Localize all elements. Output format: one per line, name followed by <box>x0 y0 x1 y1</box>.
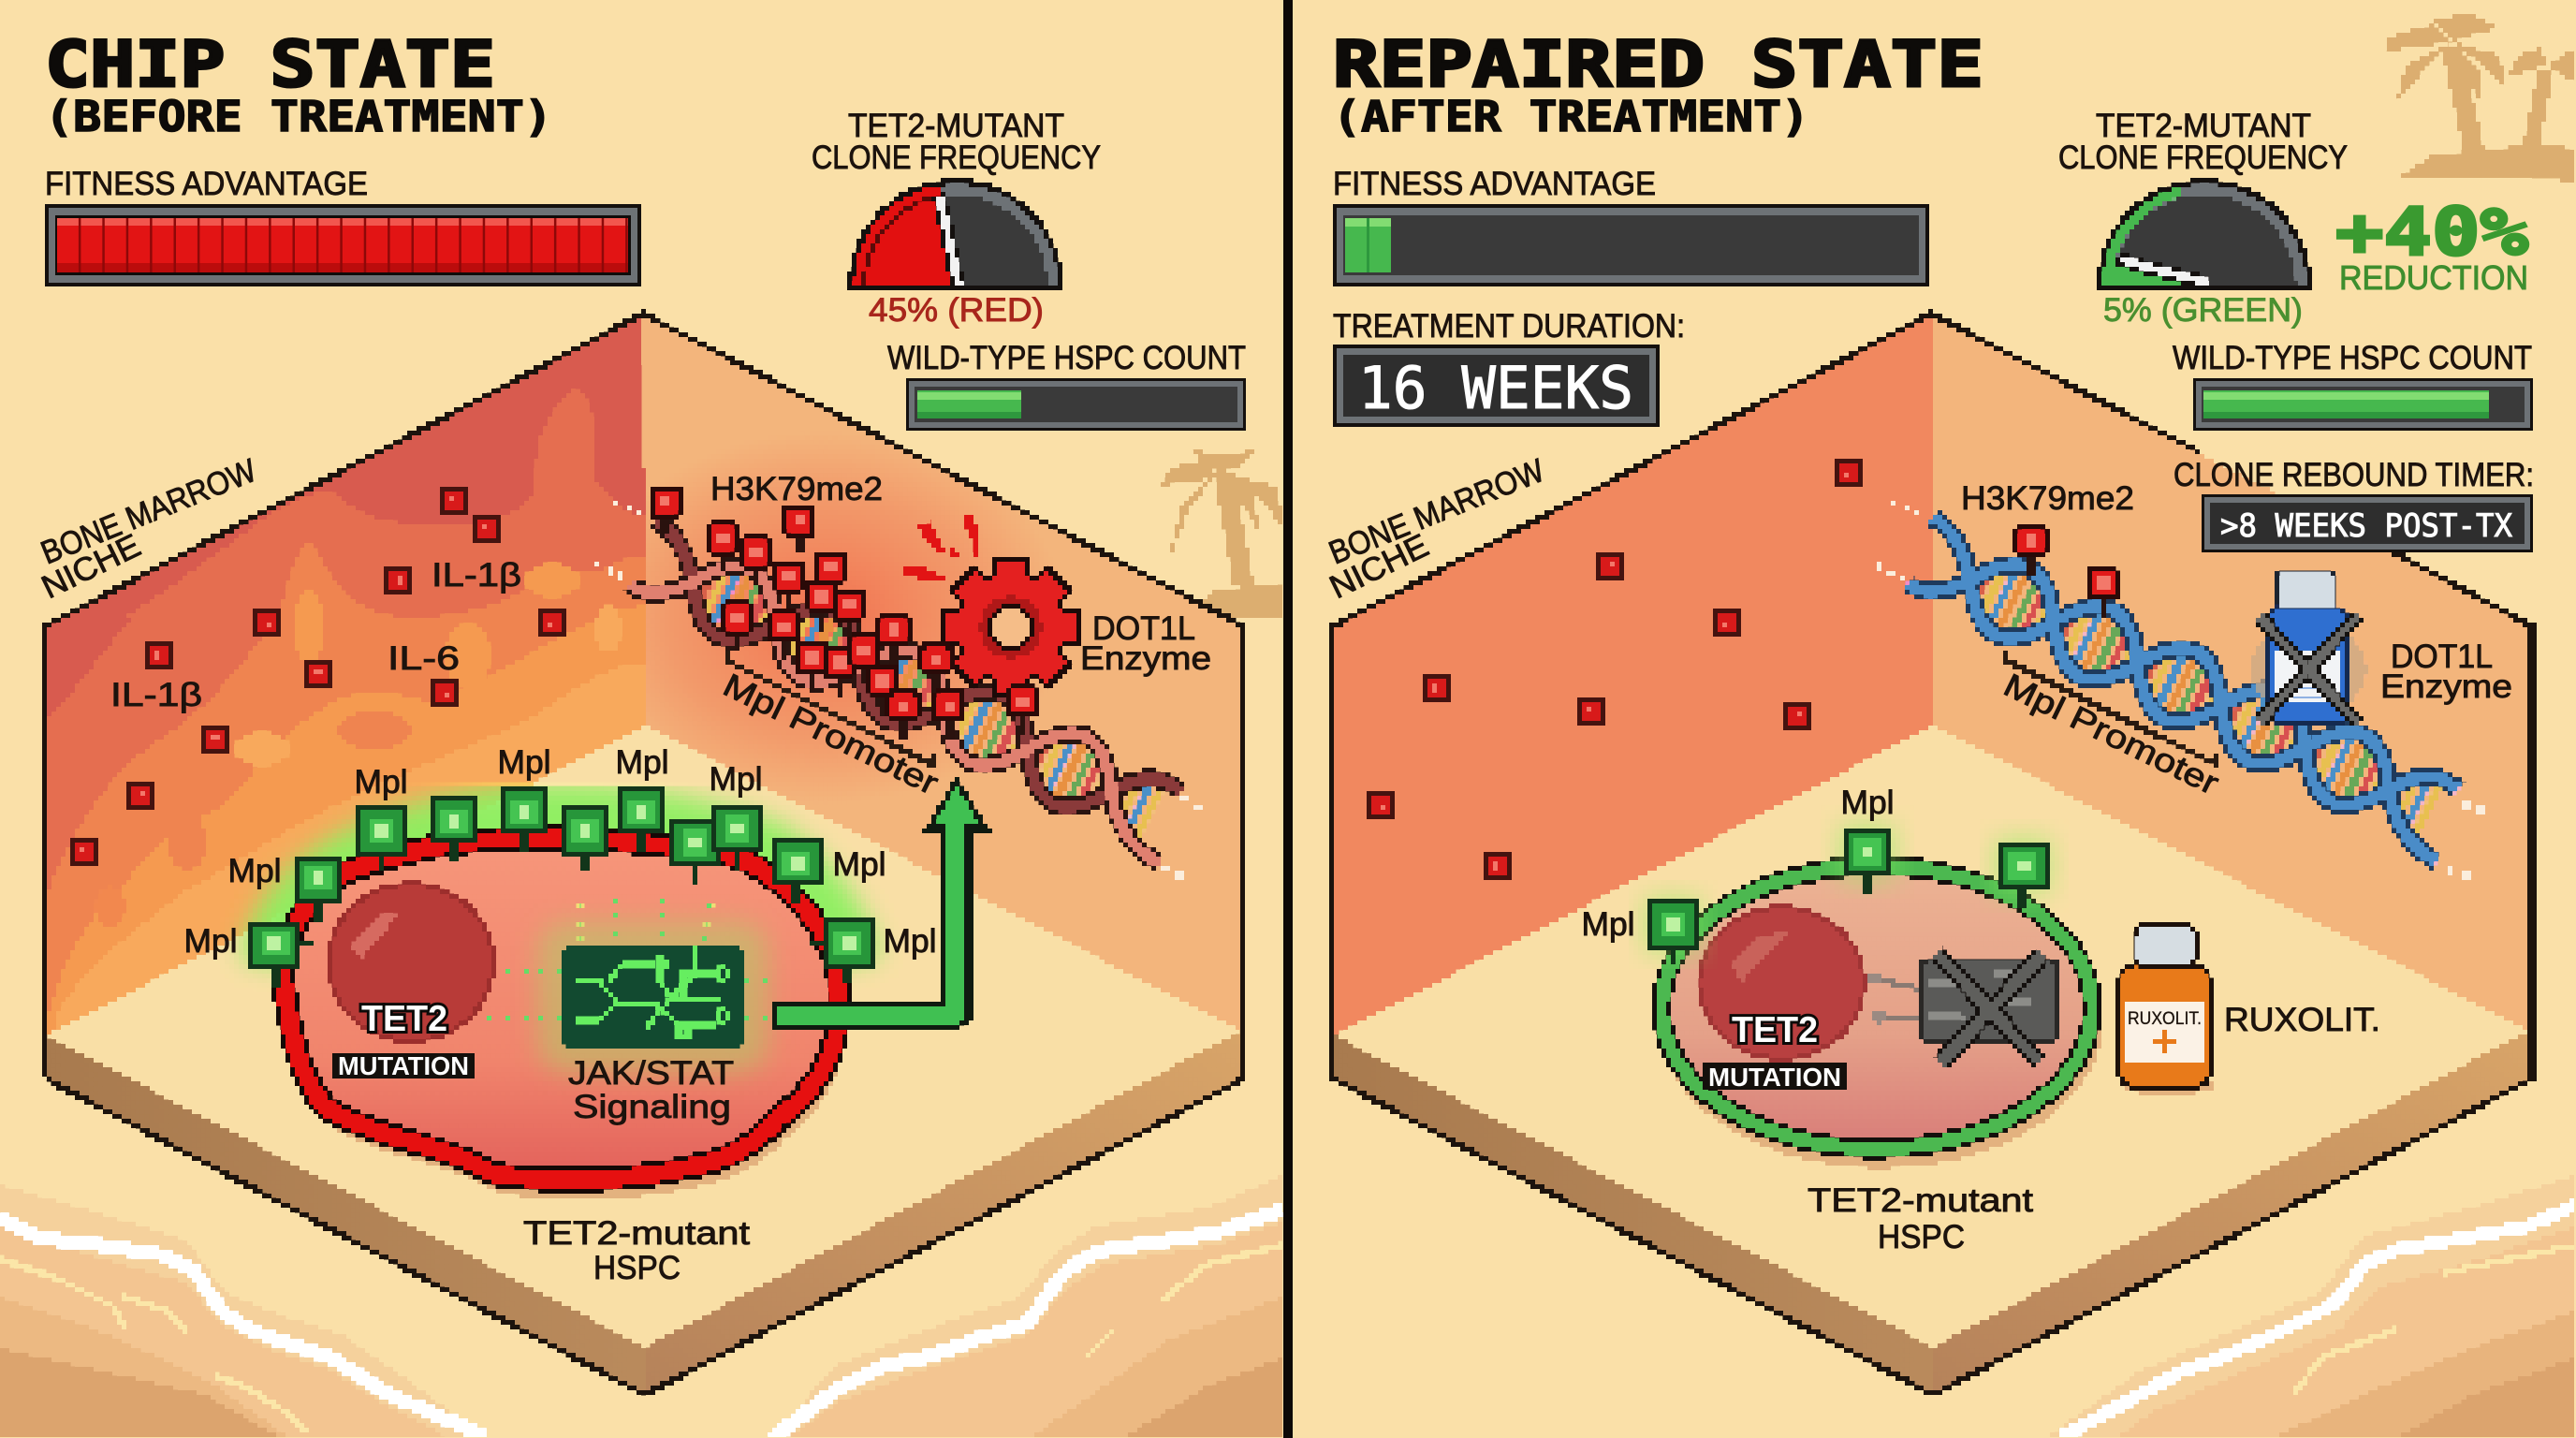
callout: plus 40 percent reduction: REDUCTION <box>2339 258 2528 297</box>
arrow: signaling to promoter <box>776 781 986 1028</box>
Mpl labels: Mpl <box>183 923 238 960</box>
room: side edges <box>45 1031 1244 1395</box>
label: bone marrow niche: NICHE <box>36 527 146 606</box>
cytokine labels: IL-1β <box>110 677 202 713</box>
gauge value: 5 percent: 5% (GREEN) <box>2103 292 2303 329</box>
label: TET2 mutation <box>1703 1010 1847 1092</box>
gauge value: 45 percent: 45% (RED) <box>869 292 1044 329</box>
title: CHIP state: (BEFORE TREATMENT) <box>45 92 552 141</box>
room: dark outline <box>1333 314 2532 1395</box>
Mpl labels: Mpl <box>710 761 762 798</box>
label: clone frequency: TET2-MUTANT <box>848 108 1064 144</box>
green receptor glow <box>283 827 839 966</box>
clone rebound timer text: CLONE REBOUND TIMER: <box>2174 457 2534 493</box>
title: CHIP state <box>45 28 552 141</box>
label: TET2 mutation: TET2 <box>1732 1010 1818 1050</box>
background sand, left <box>6 178 1282 1404</box>
label: bone marrow niche: NICHE <box>1324 527 1434 606</box>
palm trees silhouette <box>2384 14 2576 181</box>
Mpl labels: Mpl <box>884 923 936 960</box>
cytokine labels: IL-6 <box>388 640 460 677</box>
icon: DOT1L gear <box>941 557 1081 697</box>
Mpl labels <box>1582 785 1895 943</box>
panel: repaired state after treatment <box>1293 0 2576 1438</box>
Mpl labels: Mpl <box>1840 785 1895 821</box>
room: left wall <box>1333 314 1933 1035</box>
label: TET2-mutant HSPC: TET2-mutant <box>523 1215 750 1252</box>
clone rebound timer box <box>2202 494 2533 552</box>
label: fitness advantage: FITNESS ADVANTAGE <box>1333 166 1656 202</box>
room: right wall <box>1931 314 2532 1031</box>
DNA fading specks <box>594 501 1201 878</box>
Mpl labels <box>183 744 936 960</box>
nucleus <box>329 884 493 1041</box>
Mpl labels: Mpl <box>833 846 886 883</box>
title: CHIP state: CHIP STATE <box>45 28 495 102</box>
background sand, right <box>1293 0 2576 1438</box>
clone rebound timer text: >8 WEEKS POST-TX <box>2220 507 2513 545</box>
gauge: clone frequency 45 percent <box>848 179 1064 288</box>
label: DOT1L enzyme <box>2380 638 2512 705</box>
bracket: promoter region <box>727 649 933 765</box>
title: repaired state: (AFTER TREATMENT) <box>1333 92 1809 141</box>
clone rebound timer text <box>2174 457 2534 545</box>
label: DOT1L enzyme: DOT1L <box>2391 638 2493 675</box>
room: dark outline <box>45 314 1244 1395</box>
treatment duration readout: TREATMENT DURATION: <box>1333 308 1685 345</box>
label: bone marrow niche <box>36 452 261 606</box>
palm tree silhouette <box>1159 448 1283 620</box>
label: Mpl promoter: Mpl Promoter <box>717 667 944 802</box>
treatment duration readout: 16 WEEKS <box>1358 354 1633 422</box>
icon: ruxolitinib bottle body <box>2119 925 2215 1095</box>
cytokine particles, reduced <box>1368 461 1862 880</box>
TET2-mutant HSPC cell <box>283 827 846 1199</box>
label: DOT1L enzyme <box>1080 610 1211 677</box>
label: H3K79me2: H3K79me2 <box>710 471 883 507</box>
label: JAK/STAT signaling <box>568 1055 734 1125</box>
beach and waves, lower left panel <box>0 1175 1283 1438</box>
wild-type HSPC count bar <box>906 378 1246 431</box>
repaired HSPC cell <box>1658 866 2103 1168</box>
DNA helix, blue, open <box>1895 518 2474 861</box>
room: side edges <box>1333 1031 2532 1395</box>
label: TET2-mutant HSPC: TET2-mutant <box>1808 1182 2033 1219</box>
Mpl labels: Mpl <box>498 744 550 781</box>
cytokine labels: IL-1β <box>432 557 521 594</box>
label: Ruxolit.: RUXOLIT. <box>2224 1002 2380 1038</box>
label: TET2-mutant HSPC: HSPC <box>1878 1219 1965 1255</box>
Mpl labels: Mpl <box>1582 906 1634 943</box>
label: TET2 mutation: MUTATION <box>338 1051 469 1080</box>
label: TET2-mutant HSPC <box>523 1215 750 1286</box>
nucleus <box>1699 907 1864 1059</box>
label: TET2 mutation <box>332 999 475 1080</box>
Mpl labels: Mpl <box>354 764 408 800</box>
label: DOT1L enzyme: DOT1L <box>1092 610 1195 647</box>
icon: inhibited DOT1L bottle <box>2250 571 2366 723</box>
pixelated illustration layer, left <box>0 178 1283 1437</box>
label: wild-type HSPC count: WILD-TYPE HSPC COUNT <box>2173 340 2532 376</box>
pixelated illustration layer, right <box>1293 0 2576 1438</box>
activity sparks <box>903 515 977 579</box>
methylation marks, few <box>2014 524 2120 617</box>
DNA helix, heavily methylated <box>618 520 1196 863</box>
label: JAK/STAT signaling: Signaling <box>573 1089 731 1125</box>
label: TET2-mutant HSPC <box>1808 1182 2033 1255</box>
callout: plus 40 percent reduction: +40% <box>2335 194 2528 271</box>
room: floor <box>1335 726 2528 1347</box>
label: wild-type HSPC count: WILD-TYPE HSPC COUNT <box>887 340 1246 376</box>
label: clone frequency <box>812 108 1101 176</box>
label: clone frequency: TET2-MUTANT <box>2096 108 2311 144</box>
room: left wall with inflamed flames <box>45 314 655 1058</box>
label: H3K79me2: H3K79me2 <box>1961 480 2134 517</box>
wild-type HSPC count bar, high <box>2193 378 2533 431</box>
beach and waves, lower right panel <box>2045 1175 2576 1438</box>
label: TET2-mutant HSPC: HSPC <box>593 1250 681 1286</box>
label: DOT1L enzyme: Enzyme <box>1080 640 1211 677</box>
room: right wall <box>641 318 1240 1030</box>
fitness advantage bar, low <box>1333 204 1929 286</box>
label: bone marrow niche: BONE MARROW <box>1324 452 1549 571</box>
label: clone frequency: CLONE FREQUENCY <box>2058 139 2348 176</box>
label: DOT1L enzyme: Enzyme <box>2380 668 2512 705</box>
bottle label text: RUXOLIT. <box>2128 1009 2202 1029</box>
title: repaired state <box>1333 28 1983 141</box>
callout: plus 40 percent reduction <box>2335 194 2528 297</box>
label: JAK/STAT signaling: JAK/STAT <box>568 1055 734 1092</box>
methylation marks <box>649 485 1040 740</box>
label: TET2 mutation: TET2 <box>361 999 447 1039</box>
treatment duration readout <box>1333 308 1685 422</box>
Mpl receptors <box>250 786 873 986</box>
DNA fading specks <box>1875 501 2484 878</box>
label: TET2 mutation: MUTATION <box>1708 1063 1841 1092</box>
inhibited JAK/STAT chip <box>1868 953 2056 1063</box>
label: Mpl promoter: Mpl Promoter <box>1998 667 2225 802</box>
JAK/STAT circuit chip <box>489 897 772 1072</box>
label: clone frequency <box>2058 108 2348 176</box>
center divider <box>1283 0 1293 1438</box>
Mpl labels: Mpl <box>228 853 281 889</box>
fitness advantage bar, full red <box>45 204 641 286</box>
label: bone marrow niche <box>1324 452 1549 606</box>
Mpl receptors, few <box>1645 824 2051 966</box>
label: bone marrow niche: BONE MARROW <box>36 452 261 571</box>
Mpl labels: Mpl <box>616 744 668 781</box>
room: floor <box>51 726 651 1030</box>
label: clone frequency: CLONE FREQUENCY <box>812 139 1101 176</box>
bracket: promoter region <box>2007 649 2217 765</box>
cytokine labels <box>110 557 521 713</box>
title: repaired state: REPAIRED STATE <box>1333 28 1983 102</box>
treatment duration box <box>1333 345 1660 427</box>
cytokine particles <box>68 486 564 865</box>
label: fitness advantage: FITNESS ADVANTAGE <box>45 166 368 202</box>
gauge: clone frequency 5 percent <box>2097 179 2312 288</box>
panel: CHIP state before treatment <box>0 0 1283 1438</box>
